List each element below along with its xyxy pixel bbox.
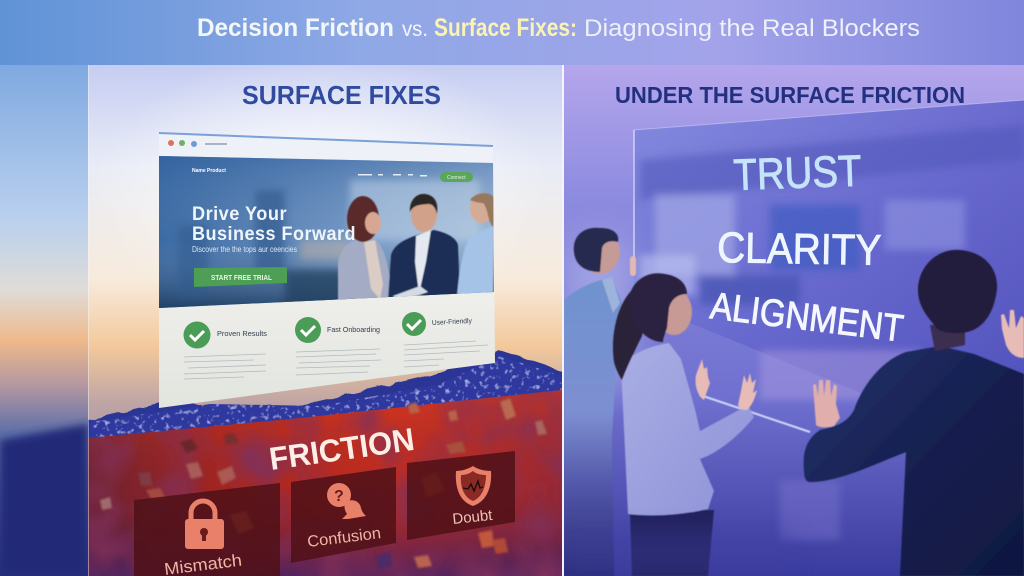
doubt label: Doubt [452,507,494,528]
glass wall [564,100,1024,540]
rock layer [88,350,562,438]
browser window mockup [159,132,495,408]
word: clarity: CLARITY [717,224,882,275]
man in navy suit [388,194,460,302]
header band [0,0,1024,70]
friction layer [88,390,562,576]
person: woman with ponytail [613,273,757,576]
rock fragments [100,398,547,570]
title: vs. [402,18,428,41]
card: confusion [291,467,396,563]
person: man in navy jacket [804,250,1024,576]
word: trust: TRUST [733,147,862,200]
button: start free trial [194,267,287,287]
neck [930,325,965,351]
feature: user-friendly [402,312,488,367]
card: mismatch [134,483,280,576]
word: alignment: ALIGNMENT [708,285,906,351]
panel divider [562,65,564,576]
panel: surface fixes [84,50,566,576]
button: start free trial: START FREE TRIAL [211,273,272,282]
card: doubt [407,451,515,540]
icon: padlock [185,501,224,549]
woman in grey blazer [338,196,391,305]
title: Decision Friction [197,14,394,42]
hand [738,373,757,410]
hand [1001,310,1024,358]
heading: UNDER THE SURFACE FRICTION [615,82,965,108]
hero headline: Business Forward [192,224,356,245]
title: Diagnosing the Real Blockers [584,15,920,42]
feature: proven results [184,322,267,379]
title [197,14,920,42]
face [656,289,692,335]
title: Surface Fixes: [434,14,577,42]
woman in blue shirt [457,193,494,296]
hero nav: Connect [447,175,466,181]
page body [159,280,495,408]
hero nav: Name Product [192,168,226,174]
panel background [564,65,1024,576]
ponytail [613,290,643,380]
panel: under the surface friction [564,65,1024,576]
hero headline: Drive Your [192,204,287,225]
shirt [621,343,754,515]
person: man at left [564,228,636,576]
hero people [338,193,494,305]
glass words [708,147,906,351]
hair [629,273,687,342]
friction heading: FRICTION [267,421,417,477]
trousers [630,510,714,576]
left sky strip [0,65,88,576]
jacket [804,346,1024,576]
surface fixes heading: SURFACE FIXES [242,80,441,110]
hero image [159,150,495,312]
feature: user-friendly: User-Friendly [432,318,473,327]
panel background [88,65,562,420]
hero nav [192,168,473,182]
feature: proven results: Proven Results [217,329,267,338]
hero subhead: Discover the the tops aur ceencies [192,245,297,254]
hand [695,359,710,400]
bottom haze [564,530,794,576]
feature: fast onboarding [295,317,381,375]
head [918,250,997,333]
icon: shield [456,466,491,506]
confusion label: Confusion [306,525,382,551]
browser toolbar [159,132,493,163]
hand [813,380,840,427]
icon: question bubble: ? [334,488,344,505]
hero headline [193,206,354,240]
feature: fast onboarding: Fast Onboarding [327,325,380,334]
